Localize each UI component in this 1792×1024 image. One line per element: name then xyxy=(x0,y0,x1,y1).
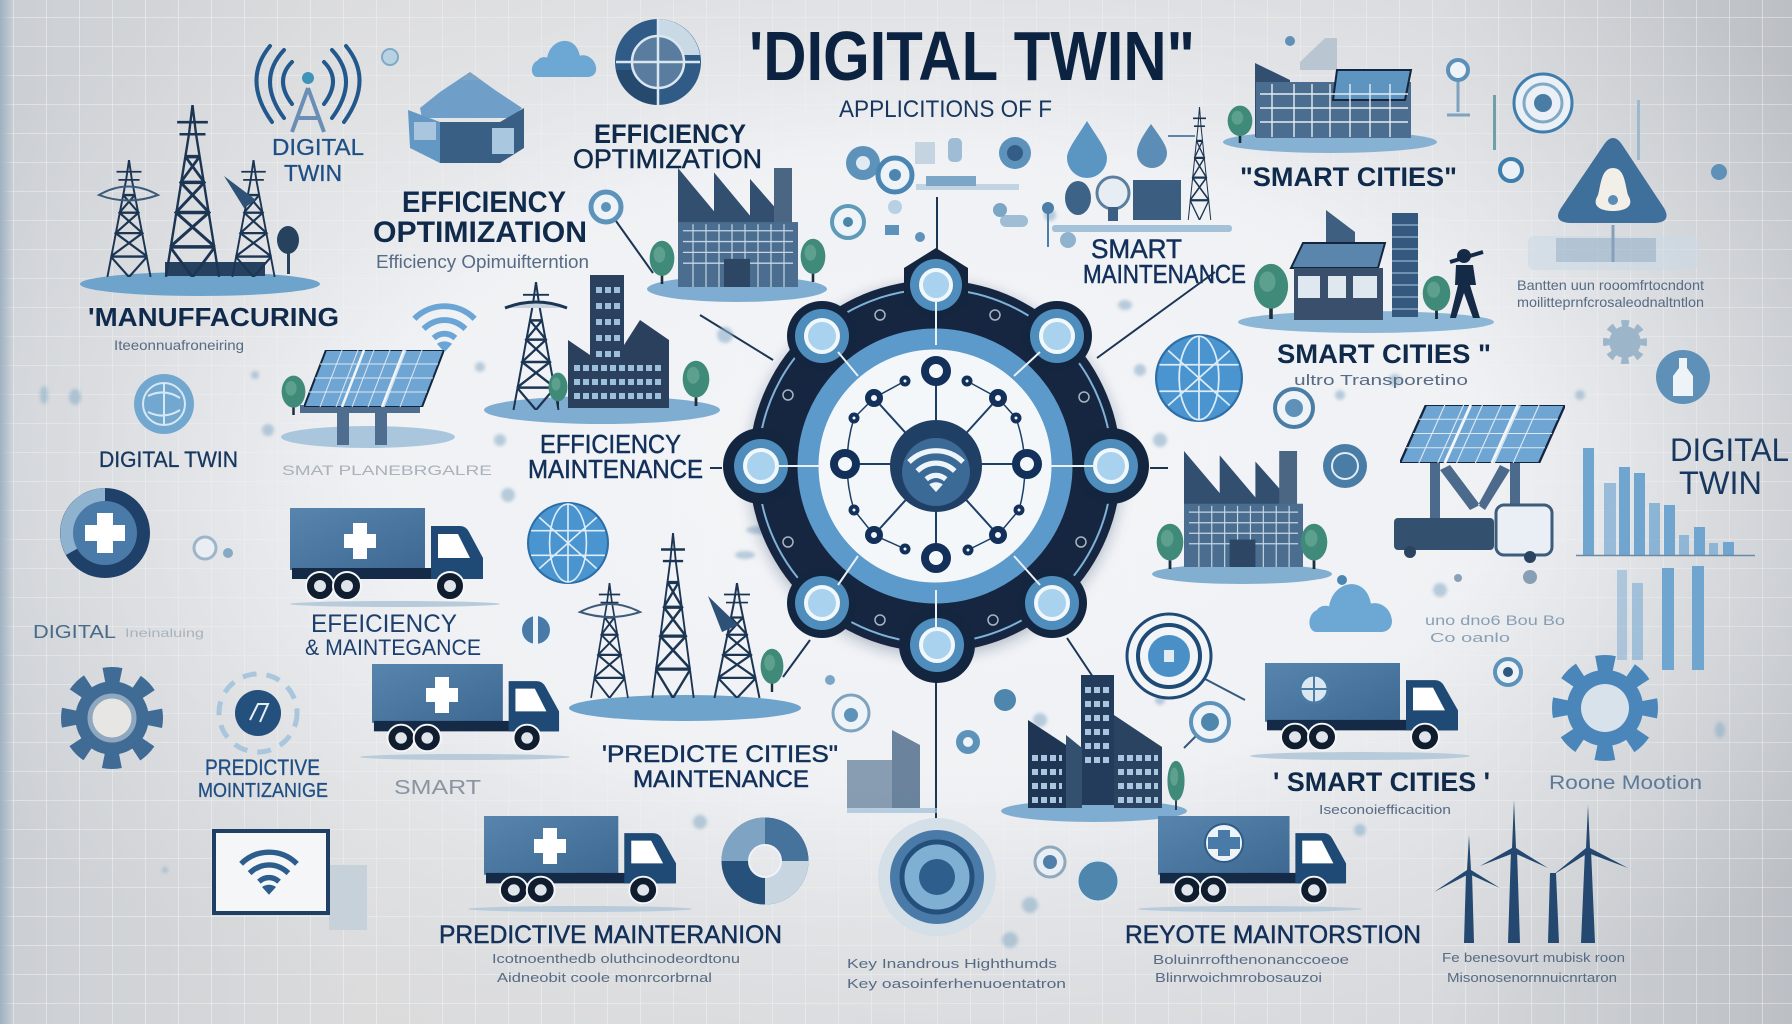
icon: signal tower xyxy=(256,46,360,132)
icon: gear right xyxy=(1560,663,1650,753)
heading: efficiency and maintenance: & MAINTEGANCE xyxy=(305,635,481,660)
subtext: turbines: Fe benesovurt mubisk roon xyxy=(1442,950,1625,965)
panel: truck cross top xyxy=(290,508,500,607)
icons: badges beside solar xyxy=(1275,389,1367,585)
subtext: predictive: Aidneobit coole monrcorbrnal xyxy=(497,970,712,985)
label: digital twin top left: TWIN xyxy=(284,160,342,186)
icon: globe right xyxy=(1156,335,1242,421)
heading: remote maintenance: REYOTE MAINTORSTION xyxy=(1125,921,1421,949)
icon: circle badge xyxy=(1191,703,1229,741)
icon: warning triangle xyxy=(1558,138,1667,223)
subtext: right column: Bantten uun rooomfrtocndont xyxy=(1517,277,1704,293)
heading: efficiency and maintenance xyxy=(305,610,481,660)
panel: tower and building xyxy=(484,275,720,424)
heading: efficiency optimization left xyxy=(373,186,587,249)
inner blue ring xyxy=(808,339,1062,593)
icon: badge near towers xyxy=(516,610,556,650)
subtitle: APPLICITIONS OF F xyxy=(839,96,1052,123)
label: digital twin right xyxy=(1670,432,1789,501)
heading: smart maintenance xyxy=(1083,234,1246,289)
heading: efficiency optimization left: OPTIMIZATION xyxy=(373,216,587,249)
label: remote monitoring: Roone Mootion xyxy=(1549,773,1702,794)
panel: smart cities middle with worker xyxy=(1238,210,1494,333)
icon: donut chart xyxy=(735,831,795,891)
inner nodes xyxy=(834,360,1038,569)
heading: predictive monitoring: MOINTIZANIGE xyxy=(198,780,328,802)
subtext: remote: Boluinrrofthenonanccoeoe xyxy=(1153,952,1349,967)
icon: top circle xyxy=(615,19,701,105)
subtext: turbines: Misonosenornnuicnrtaron xyxy=(1447,970,1617,985)
icon cluster top center xyxy=(832,137,1031,242)
subtext: key highlights xyxy=(847,956,1066,991)
label: digital twin top left xyxy=(272,134,364,186)
icon: drop xyxy=(382,49,398,65)
icon: predictive gauge xyxy=(219,674,297,752)
icon: cross badge xyxy=(60,488,150,578)
faded text cluster right: Co oanlo xyxy=(1430,630,1510,645)
label: digital twin left: DIGITAL TWIN xyxy=(99,447,238,472)
central wifi hub xyxy=(890,420,982,512)
icons: small badges lower center xyxy=(825,675,1016,754)
eight outer nodes xyxy=(723,248,1149,683)
heading: efficiency maintenance xyxy=(528,429,703,484)
faded equipment panel xyxy=(1528,225,1698,270)
icon: wifi left xyxy=(414,306,475,352)
heading: efficiency optimization left: EFFICIENCY xyxy=(402,186,566,219)
faded scatter of small marks xyxy=(40,209,1725,948)
icon: globe badge left xyxy=(134,374,194,434)
panel: factory right xyxy=(1152,451,1332,584)
heading: predicte cities maintenance xyxy=(602,741,838,793)
heading: efficiency and maintenance: EFEICIENCY xyxy=(311,610,457,638)
heading: smart maintenance: MAINTENANCE xyxy=(1083,259,1246,289)
icon: small gear xyxy=(1607,324,1643,360)
panel: truck predictive xyxy=(468,816,692,912)
subtext: right column xyxy=(1517,277,1704,310)
panel: solar panel right xyxy=(1394,405,1565,563)
small faded building xyxy=(847,730,937,813)
panel: solar panel left xyxy=(281,350,455,448)
ring ornaments xyxy=(783,310,1089,625)
icon: bottle badge xyxy=(1656,350,1710,404)
panel: truck remote xyxy=(1138,816,1362,912)
icon: tablet with wifi xyxy=(214,831,367,930)
subtext: predictive: Icotnoenthedb oluthcinodeordtonu xyxy=(492,951,740,966)
heading: predicte cities maintenance: 'PREDICTE CITIES" xyxy=(602,741,838,768)
heading: smart cities lower right: ' SMART CITIES ' xyxy=(1273,767,1490,797)
subtext: remote: Blinrwoichmrobosauzoi xyxy=(1155,970,1322,985)
icon: cloud xyxy=(532,41,596,77)
heading: predictive monitoring: PREDICTIVE xyxy=(205,755,320,780)
label: digital twin right: TWIN xyxy=(1679,465,1762,501)
icons: badges near lower truck xyxy=(1035,847,1119,902)
icon: target xyxy=(1127,614,1211,698)
icon: bottom center target xyxy=(878,818,996,936)
icon: wind turbines xyxy=(1434,800,1628,943)
subtext: efficiency optimization: Efficiency Opimuifterntion xyxy=(376,252,589,272)
icon: cloud right xyxy=(1309,584,1392,632)
panel: towers lower xyxy=(569,533,801,721)
heading: smart maintenance: SMART xyxy=(1091,234,1182,264)
faded label: smart: SMAT PLANEBRGALRE xyxy=(282,462,492,478)
faded text cluster right xyxy=(1425,570,1565,645)
bar chart top xyxy=(1576,448,1755,556)
panel: building lower xyxy=(1001,675,1187,822)
heading: smart cities top: "SMART CITIES" xyxy=(1240,162,1457,192)
heading: efficiency maintenance: EFFICIENCY xyxy=(540,429,681,459)
panel: truck cross middle xyxy=(360,664,570,760)
panel: manufacturing towers xyxy=(80,105,320,296)
subtext: predictive xyxy=(492,951,740,985)
heading: manufacturing: 'MANUFFACURING xyxy=(88,302,339,332)
pin icon near factory xyxy=(591,192,621,222)
connector lines xyxy=(606,197,1245,820)
heading: predicte cities maintenance: MAINTENANCE xyxy=(633,766,809,793)
subtext: remote xyxy=(1153,952,1349,985)
icon: small eye badge xyxy=(1495,659,1521,685)
label: digital twin right: DIGITAL xyxy=(1670,432,1789,468)
central hub diagram xyxy=(723,248,1149,683)
faded text cluster right: uno dno6 Bou Bo xyxy=(1425,612,1565,628)
label: digital faded xyxy=(33,622,204,642)
bar chart lower xyxy=(1617,566,1704,670)
subtext: turbines xyxy=(1442,950,1625,985)
label: digital twin top left: DIGITAL xyxy=(272,134,364,160)
subtext: smart cities lower: Iseconoiefficacition xyxy=(1319,802,1451,817)
thin blue ring line xyxy=(758,289,1112,643)
subtext: transportation: ultro Transporetino xyxy=(1294,372,1468,389)
heading: efficiency optimization top: OPTIMIZATION xyxy=(573,144,762,174)
spoke lines xyxy=(776,300,1096,630)
heading: smart cities middle: SMART CITIES " xyxy=(1277,339,1491,369)
icon: globe mid xyxy=(528,503,608,583)
label: smart faded: SMART xyxy=(394,777,481,799)
icon: faded badge xyxy=(194,537,233,559)
panel: factory top center xyxy=(647,168,827,302)
icons right column small xyxy=(1447,60,1727,181)
title: 'DIGITAL TWIN" xyxy=(749,17,1195,95)
subtext: key highlights: Key oasoinferhenuoentatron xyxy=(847,976,1066,991)
outer dark ring xyxy=(749,280,1121,652)
worker figure xyxy=(1450,249,1483,318)
icon cluster: drops, monitor, tower xyxy=(1042,107,1232,248)
label: digital faded: Ineinaluing xyxy=(125,626,204,640)
heading: efficiency optimization top: EFFICIENCY xyxy=(594,119,746,149)
heading: efficiency optimization top xyxy=(573,119,762,174)
icon: gear left xyxy=(69,675,155,761)
heading: predictive maintenance bottom: PREDICTIVE MAINTERANION xyxy=(439,921,782,949)
heading: predictive monitoring xyxy=(198,755,328,802)
heading: efficiency maintenance: MAINTENANCE xyxy=(528,454,703,484)
label: digital faded: DIGITAL xyxy=(33,622,116,642)
subtext: manufacturing: Iteeonnuafroneiring xyxy=(114,337,244,353)
subtext: right column: moilitteprnfcrosaleodnaltntlon xyxy=(1517,294,1704,310)
icon: blue building xyxy=(408,72,524,163)
panel: smart cities top xyxy=(1223,36,1437,153)
subtext: key highlights: Key Inandrous Highthumds xyxy=(847,956,1058,971)
panel: truck smart cities xyxy=(1250,663,1470,760)
